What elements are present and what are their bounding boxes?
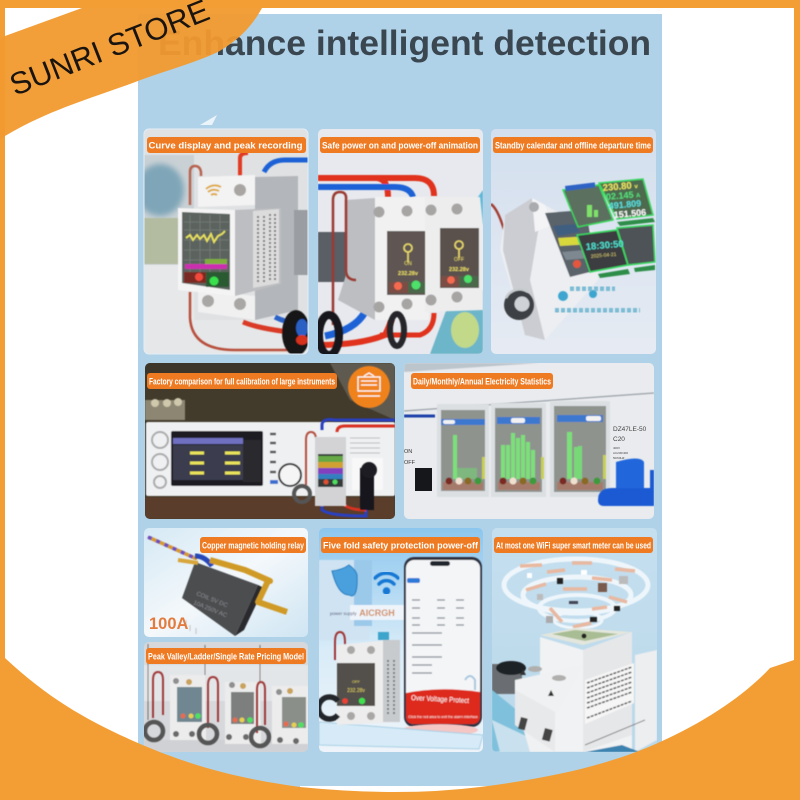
smart phone app	[404, 557, 482, 727]
breaker rating text: 50/60HZ	[613, 456, 625, 460]
relay block	[182, 562, 264, 636]
heading: holding relay: Copper magnetic holding relay	[202, 540, 305, 550]
loop wire and rings	[319, 192, 404, 355]
wires and current ring	[190, 166, 310, 356]
icon: wifi	[375, 573, 398, 593]
background blocks: AICRGH	[359, 608, 395, 618]
colourful backdrop	[430, 190, 483, 354]
heading: five fold safety: Five fold safety protection power-off	[323, 540, 479, 550]
platform	[319, 722, 483, 749]
panel: pricing model	[144, 642, 308, 752]
background blocks: power supply	[330, 611, 357, 616]
small white sliver	[200, 115, 217, 125]
orange instrument badge	[348, 366, 390, 408]
banner shape	[0, 8, 262, 140]
heading: pricing model	[146, 648, 306, 664]
relay block: 10A 250V AC	[192, 600, 228, 619]
twisted wire	[148, 537, 197, 559]
floating screens: 491.809	[608, 198, 642, 211]
floating screens: 18:30:50	[585, 239, 624, 253]
heading: wifi smart meter: At most one WiFi super smart meter can be used	[496, 540, 651, 550]
heading: safe power	[320, 137, 480, 153]
floating screens: 230.80 v	[602, 180, 639, 194]
heading: pricing model: Peak Valley/Ladder/Single Rate Pricing Model	[148, 650, 304, 662]
panel: five fold safety protection	[319, 528, 483, 752]
smart phone app: Over Voltage Protect	[411, 693, 469, 705]
device: ON meter	[338, 197, 429, 320]
heading: factory comparison	[147, 373, 337, 389]
smart phone app: Click the red area to exit the alarm interface	[408, 715, 478, 719]
heading: curve display: Curve display and peak recording	[148, 140, 303, 150]
heading: safe power: Safe power on and power-off animation	[322, 140, 478, 150]
relay block: COIL 5V DC	[195, 591, 229, 610]
device: OFF meter: OFF	[454, 257, 464, 263]
statistic screen: day	[437, 404, 489, 497]
window scene	[136, 155, 308, 355]
panel border: card one	[144, 129, 308, 354]
device: OFF meter	[425, 197, 483, 312]
panel: daily monthly annual statistics	[404, 363, 654, 519]
heading: five fold safety	[321, 537, 480, 553]
device: ON meter: ON	[404, 261, 412, 267]
device: OFF meter: 232.28v	[449, 267, 470, 273]
icon: shield	[332, 565, 357, 596]
statistic screen: year	[550, 401, 610, 497]
heading: electricity statistics: Daily/Monthly/Annual Electricity Statistics	[413, 376, 551, 386]
floating screens: 02.145 A	[606, 189, 641, 202]
store banner	[0, 0, 262, 140]
breaker rating text: 400V	[613, 446, 620, 450]
wires	[318, 178, 434, 345]
meter two	[199, 677, 261, 744]
main title: Enhance intelligent detection	[158, 23, 651, 63]
scattered teal glyphs	[555, 288, 640, 311]
peach device tags	[520, 563, 635, 627]
device body	[492, 628, 657, 752]
heading: standby calendar: Standby calendar and offline departure time	[495, 140, 651, 150]
device: meter: OFF	[352, 679, 361, 684]
bottom white strip	[300, 786, 490, 794]
switch window and labels: ON	[404, 449, 412, 455]
blue breaker handle	[598, 458, 654, 506]
lab background	[145, 363, 395, 519]
floating screens: 151.506	[613, 207, 647, 220]
small device modules	[527, 570, 628, 623]
meter one	[145, 672, 206, 740]
meter three	[251, 682, 308, 746]
background blocks	[319, 560, 405, 640]
breaker rating text: DZ47LE-50	[613, 426, 647, 433]
heading: factory comparison: Factory comparison for full calibration of large instruments	[149, 376, 335, 386]
device: meter	[319, 632, 400, 725]
blue poster background	[138, 14, 662, 790]
switch window and labels	[404, 449, 432, 491]
panel: wifi super smart meter	[492, 528, 657, 752]
instrument body	[146, 422, 395, 496]
breaker rating text: C20	[613, 436, 625, 443]
100A label: 100A	[149, 615, 189, 633]
wifi tornado rings	[504, 559, 648, 628]
floating screens	[563, 179, 655, 278]
switch window and labels: OFF	[404, 460, 416, 466]
din rail	[318, 231, 346, 283]
panel: safe power on and off	[318, 129, 483, 355]
breaker rating text	[613, 426, 647, 460]
heading: curve display	[147, 137, 306, 153]
device: ON meter: 232.28v	[398, 271, 419, 277]
heading: standby calendar	[493, 137, 653, 153]
statistic screen: month	[491, 403, 546, 497]
breaker rating text: AC230/400	[613, 451, 628, 455]
device: curve meter	[178, 153, 310, 320]
gold terminal	[178, 556, 287, 612]
current ring	[504, 289, 534, 320]
heading: electricity statistics	[411, 373, 553, 389]
floating screens: 2025-04-21	[591, 252, 617, 260]
panel: standby calendar	[491, 129, 656, 354]
backdrop	[144, 644, 308, 720]
panel: factory comparison	[145, 363, 395, 519]
device: exploded meter	[491, 198, 600, 340]
heading: holding relay	[200, 537, 306, 553]
device: meter: 232.28v	[347, 688, 365, 694]
breaker edge lines	[404, 363, 654, 416]
wires and meter with plug	[294, 420, 395, 516]
panel: curve display and peak recording	[136, 129, 310, 356]
heading: wifi smart meter	[494, 537, 653, 553]
panel: copper magnetic holding relay	[144, 528, 308, 637]
